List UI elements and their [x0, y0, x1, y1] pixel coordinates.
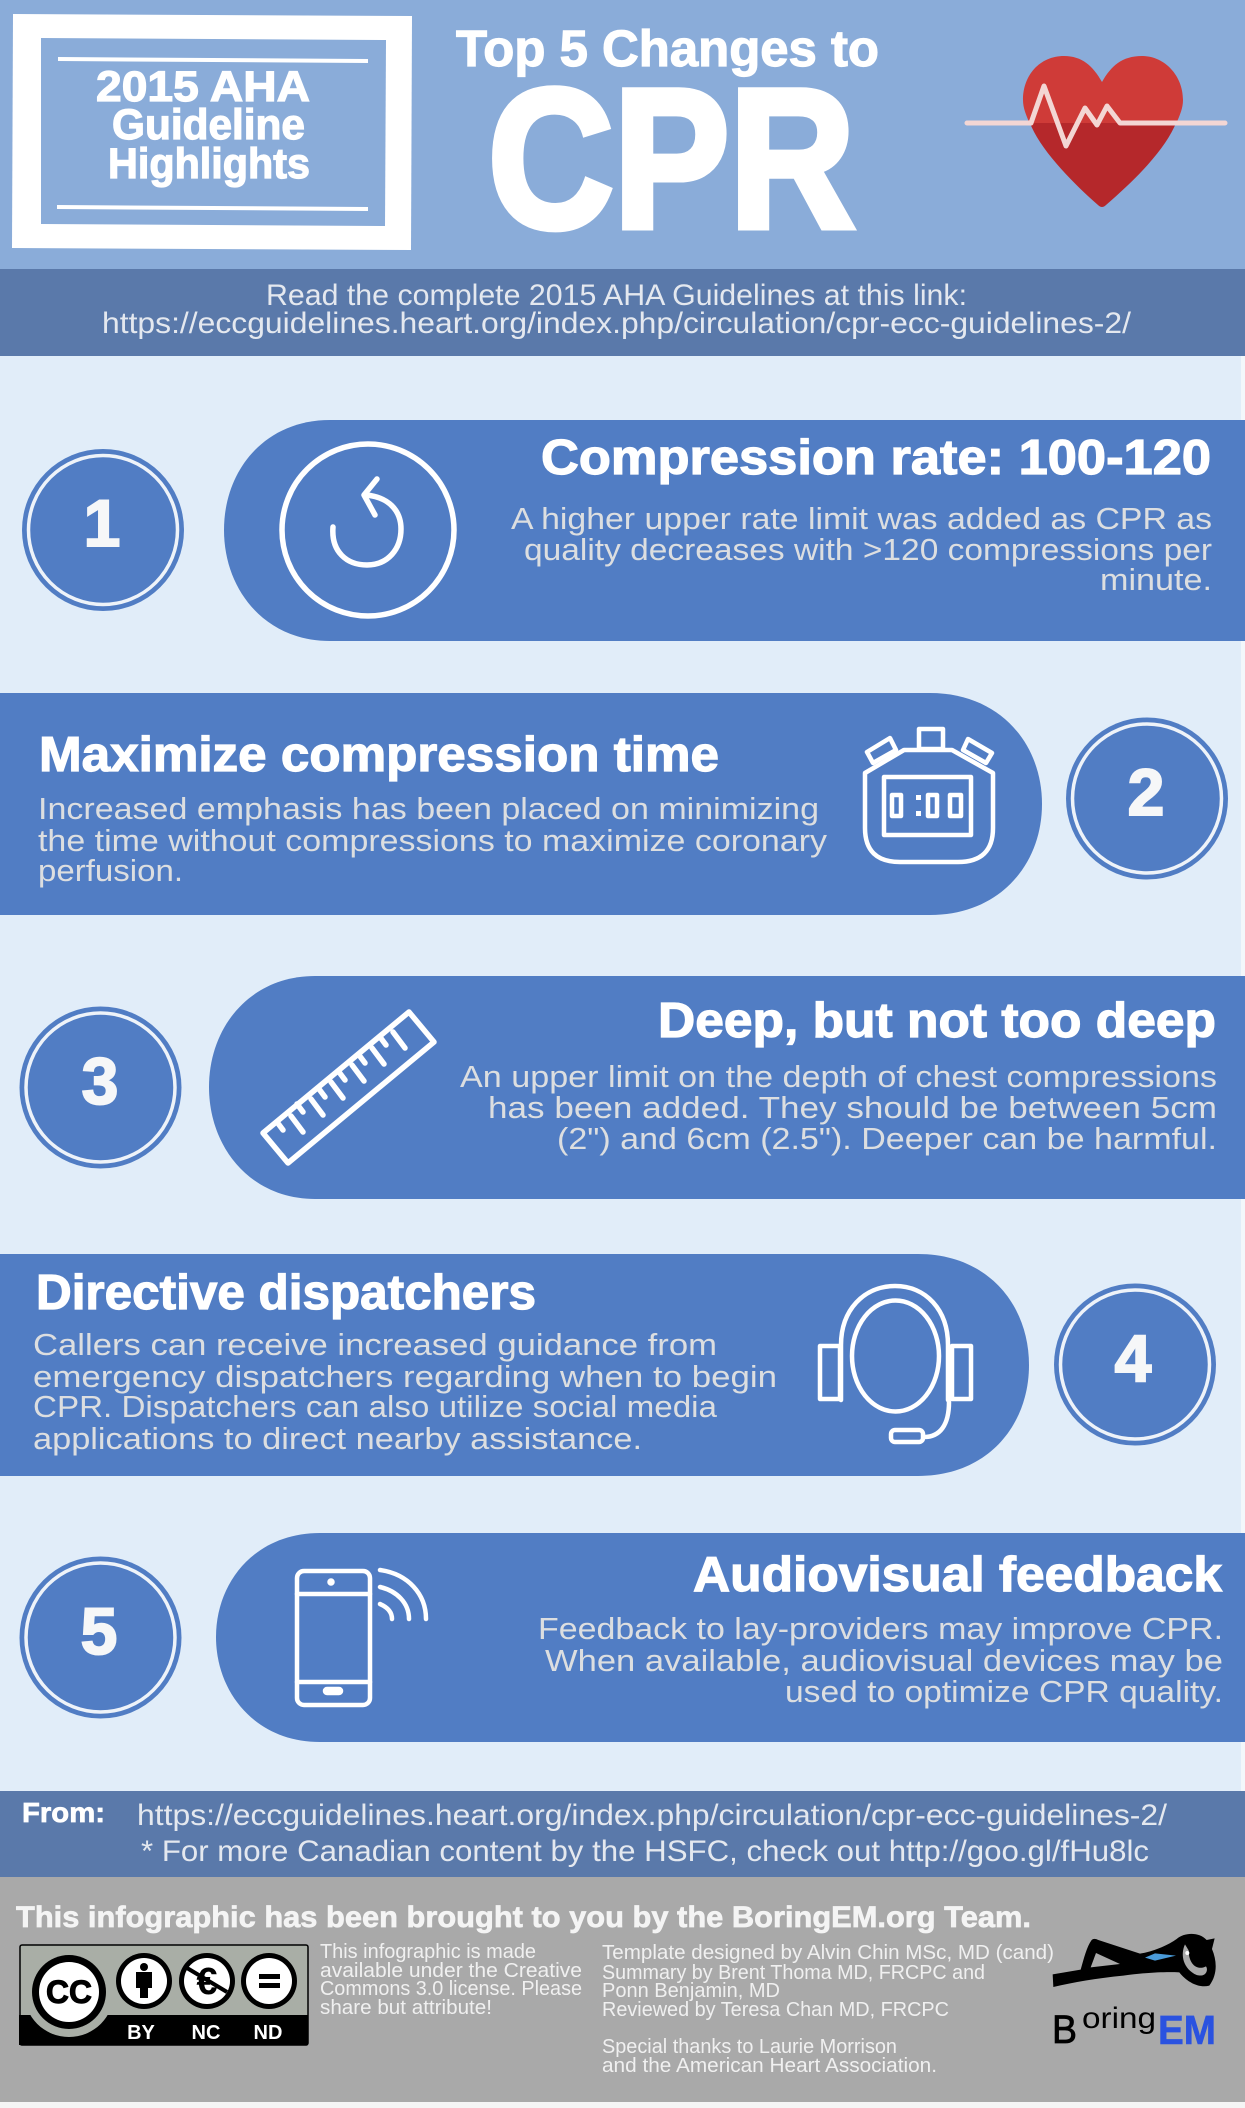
heading: Compression rate: 100-120 [541, 431, 1211, 485]
body text: has been added. They should be between 5cm [488, 1090, 1217, 1125]
number badge 4 [1054, 1284, 1216, 1446]
number badge 3: 3 [82, 1044, 118, 1118]
source banner: * For more Canadian content by the HSFC, check out http://goo.gl/fHu8lc [141, 1835, 1149, 1868]
logo: BoringEM: EM [1158, 2007, 1216, 2053]
number badge 5 [20, 1556, 182, 1718]
icon: Creative Commons BY-NC-ND badge: € [196, 1961, 218, 2003]
heading: Audiovisual feedback [693, 1548, 1223, 1602]
icon: Creative Commons BY-NC-ND badge: CC [46, 1974, 92, 2010]
body text: minute. [1100, 562, 1212, 597]
source banner: From: [22, 1797, 105, 1828]
body text: the time without compressions to maximize coronary [38, 823, 828, 858]
license text [320, 1941, 582, 2019]
icon: Creative Commons BY-NC-ND badge: NC [192, 2022, 220, 2044]
logo: BoringEM [1052, 1934, 1216, 2053]
credits text: and the American Heart Association. [602, 2055, 937, 2077]
link banner: https://eccguidelines.heart.org/index.php/circulation/cpr-ecc-guidelines-2/ [102, 307, 1132, 340]
body text: Callers can receive increased guidance from [33, 1327, 717, 1362]
logo: BoringEM: B [1052, 2008, 1077, 2052]
number badge 3 [20, 1006, 182, 1168]
icon: stopwatch [865, 729, 993, 862]
license text: This infographic is made [320, 1941, 536, 1963]
source banner [0, 1791, 1245, 1877]
license text: share but attribute! [320, 1997, 492, 2019]
body text: applications to direct nearby assistance. [33, 1421, 642, 1456]
body text [511, 501, 1212, 597]
title: Top 5 Changes to [456, 20, 879, 77]
number badge 4: 4 [1115, 1321, 1152, 1395]
credits text: Ponn Benjamin, MD [602, 1980, 780, 2002]
icon: headset [820, 1286, 971, 1442]
icon: smartphone with signal [297, 1570, 426, 1705]
number badge 2 [1066, 718, 1228, 880]
badge: 2015 AHA Guideline Highlights: 2015 AHA [96, 63, 310, 111]
icon: Creative Commons BY-NC-ND badge [19, 1945, 308, 2045]
panel: step 4 directive dispatchers [0, 1254, 1216, 1476]
icon: heart with ECG line [967, 56, 1225, 207]
body text [538, 1611, 1223, 1709]
heading: Directive dispatchers [36, 1266, 536, 1320]
panel: step 3 deep but not too deep [20, 976, 1245, 1199]
icon: Creative Commons BY-NC-ND badge: BY [127, 2022, 156, 2044]
badge: 2015 AHA Guideline Highlights: Guideline [112, 101, 305, 149]
panel: step 1 compression rate [22, 420, 1245, 641]
body text: A higher upper rate limit was added as CPR as [511, 501, 1212, 536]
license text: Commons 3.0 license. Please [320, 1978, 582, 2000]
icon: rate arrow in circle [282, 444, 454, 616]
number badge 5: 5 [81, 1594, 117, 1668]
number badge 1 [22, 449, 184, 611]
license text: available under the Creative [320, 1960, 582, 1982]
body text: When available, audiovisual devices may be [545, 1643, 1223, 1678]
body text: An upper limit on the depth of chest compressions [460, 1059, 1217, 1094]
body text [33, 1327, 777, 1456]
body text: Feedback to lay-providers may improve CPR. [538, 1611, 1223, 1646]
body text: emergency dispatchers regarding when to begin [33, 1359, 777, 1394]
footer panel [0, 1877, 1245, 2108]
title: CPR [488, 48, 855, 269]
heading: Deep, but not too deep [658, 994, 1216, 1048]
link banner: Read the complete 2015 AHA Guidelines at this link: [266, 279, 967, 312]
body text [38, 791, 828, 888]
source banner: https://eccguidelines.heart.org/index.php/circulation/cpr-ecc-guidelines-2/ [137, 1799, 1168, 1832]
body text: quality decreases with >120 compressions per [524, 532, 1212, 567]
body text: Increased emphasis has been placed on minimizing [38, 791, 819, 826]
heading: Maximize compression time [39, 728, 719, 782]
credits text: Special thanks to Laurie Morrison [602, 2036, 897, 2058]
header panel [0, 0, 1245, 269]
body text: perfusion. [38, 853, 183, 888]
panel: step 5 audiovisual feedback [20, 1533, 1245, 1742]
number badge 2: 2 [1128, 755, 1164, 829]
credits text: Template designed by Alvin Chin MSc, MD (cand) [602, 1942, 1054, 1964]
number badge 1: 1 [84, 486, 120, 560]
credits text: Summary by Brent Thoma MD, FRCPC and [602, 1962, 985, 1984]
badge: 2015 AHA Guideline Highlights: Highlights [108, 140, 310, 188]
badge: 2015 AHA Guideline Highlights [12, 14, 412, 250]
body text: (2") and 6cm (2.5"). Deeper can be harmful. [557, 1121, 1217, 1156]
panel: step 2 maximize compression time [0, 693, 1228, 915]
body text: CPR. Dispatchers can also utilize social media [33, 1389, 718, 1424]
icon: Creative Commons BY-NC-ND badge: ND [254, 2022, 282, 2044]
body text: used to optimize CPR quality. [785, 1674, 1223, 1709]
link banner [0, 269, 1245, 356]
body text [460, 1059, 1217, 1156]
footer heading: This infographic has been brought to you by the BoringEM.org Team. [16, 1901, 1031, 1934]
logo: BoringEM: oring [1082, 2002, 1156, 2035]
icon: ruler [263, 1012, 434, 1163]
credits text [602, 1942, 1054, 2077]
credits text: Reviewed by Teresa Chan MD, FRCPC [602, 1999, 949, 2021]
